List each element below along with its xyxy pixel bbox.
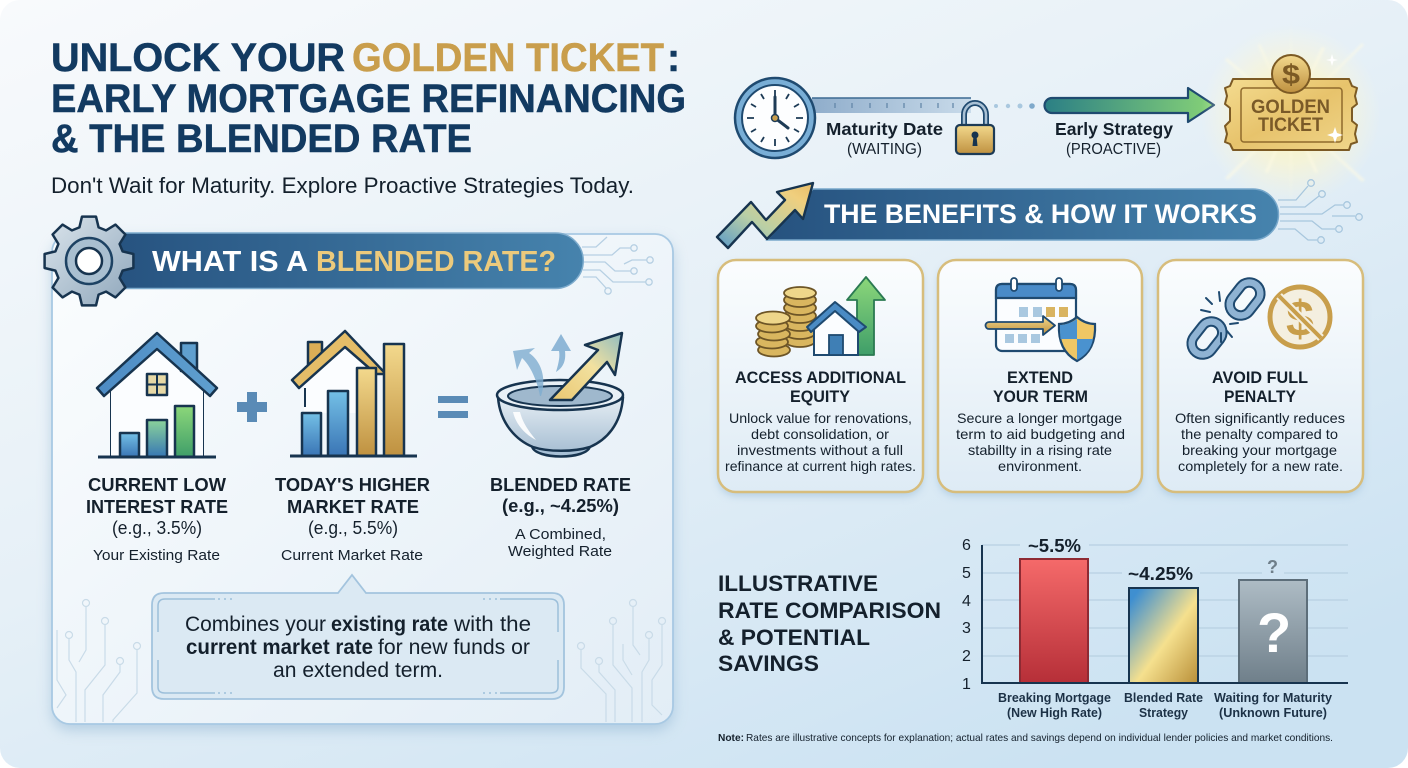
bar: blended rate	[1129, 588, 1198, 683]
label: current low rate: CURRENT LOW	[88, 475, 226, 495]
text: avoid full penalty: PENALTY	[1224, 388, 1296, 406]
text: avoid full penalty: completely for a new rate.	[1178, 458, 1343, 474]
callout: current market rate	[186, 636, 373, 659]
arrow: early strategy	[1045, 88, 1214, 122]
label: higher market rate: Current Market Rate	[281, 547, 423, 564]
label: blended rate: BLENDED RATE	[490, 475, 631, 495]
category labels: Waiting for Maturity	[1214, 690, 1333, 705]
circuit decoration banner	[582, 237, 653, 294]
panel: extend your term	[938, 260, 1142, 496]
label: early strategy: Early Strategy	[1055, 119, 1173, 139]
category labels: (New High Rate)	[1007, 705, 1102, 720]
category labels: Breaking Mortgage	[998, 690, 1111, 705]
icon: golden ticket: GOLDEN	[1251, 96, 1330, 118]
label: blended rate: A Combined,	[515, 526, 606, 543]
label: higher market rate	[275, 475, 430, 564]
heading: rate comparison: SAVINGS	[718, 651, 819, 676]
icon: rising arrow	[717, 183, 813, 248]
value labels: ~4.25%	[1128, 563, 1193, 584]
label: higher market rate: TODAY'S HIGHER	[275, 475, 430, 495]
panel: access additional equity	[718, 260, 923, 496]
text: access additional equity: debt consolidation, or	[751, 426, 889, 442]
label: early strategy	[1055, 119, 1173, 158]
icon: no dollar sign	[1270, 287, 1330, 347]
icon: equals	[438, 396, 468, 418]
y axis labels: 5	[962, 565, 971, 582]
heading banner: BLENDED RATE?	[316, 246, 556, 278]
icon: padlock	[956, 103, 994, 154]
heading: rate comparison: ILLUSTRATIVE	[718, 571, 878, 596]
text: access additional equity	[725, 369, 916, 474]
title: & THE BLENDED RATE	[51, 117, 472, 161]
heading banner: WHAT IS A	[152, 246, 308, 278]
callout: for new funds or	[378, 636, 530, 659]
callout	[152, 575, 564, 699]
text: avoid full penalty	[1175, 369, 1345, 474]
text: extend your term: environment.	[998, 458, 1082, 474]
icon: calendar shield	[986, 278, 1095, 361]
text: access additional equity: EQUITY	[790, 388, 850, 406]
heading: benefits banner	[717, 180, 1362, 248]
label: higher market rate: MARKET RATE	[287, 497, 419, 517]
title: GOLDEN TICKET	[352, 36, 664, 80]
panel: avoid full penalty	[1158, 260, 1363, 496]
icon: house with rising bars	[290, 331, 417, 456]
text: avoid full penalty: breaking your mortgage	[1182, 442, 1337, 458]
icon: golden ticket: $	[1282, 59, 1300, 90]
y axis labels: 1	[962, 676, 971, 693]
text: access additional equity: ACCESS ADDITIONAL	[735, 369, 906, 387]
label: current low rate: Your Existing Rate	[93, 547, 220, 564]
callout: existing rate	[331, 613, 448, 636]
circuit decoration left	[57, 600, 140, 722]
label: current low rate: (e.g., 3.5%)	[112, 518, 202, 538]
text: extend your term: term to aid budgeting and	[956, 426, 1125, 442]
icon: no dollar sign: $	[1286, 291, 1314, 347]
heading: rate comparison: & POTENTIAL	[718, 625, 870, 650]
title: EARLY MORTGAGE REFINANCING	[51, 77, 686, 121]
y axis labels: 6	[962, 537, 971, 554]
label: maturity date	[826, 119, 943, 158]
icon: gear	[45, 217, 133, 305]
text: avoid full penalty: AVOID FULL	[1212, 369, 1308, 387]
y axis labels: 4	[962, 593, 971, 610]
value labels: ?	[1257, 601, 1291, 664]
icon: golden ticket: TICKET	[1258, 114, 1323, 136]
category labels	[998, 690, 1333, 720]
heading banner	[110, 233, 583, 288]
text: extend your term: YOUR TERM	[993, 388, 1088, 406]
icon: coins house arrow	[756, 277, 885, 356]
timeline bar	[812, 98, 971, 113]
y axis labels: 3	[962, 620, 971, 637]
label: current low rate	[86, 475, 228, 564]
icon: mixing bowl	[497, 333, 623, 456]
icon: house with low bars	[97, 333, 217, 457]
callout: an extended term.	[273, 659, 443, 682]
callout: Combines your	[185, 613, 326, 636]
text: access additional equity: refinance at current high rates.	[725, 458, 916, 474]
text: extend your term	[956, 369, 1125, 474]
category labels: (Unknown Future)	[1219, 705, 1327, 720]
bar chart	[962, 535, 1348, 720]
text: access additional equity: Unlock value for renovations,	[729, 410, 912, 426]
timeline: maturity to golden ticket	[735, 18, 1381, 212]
footnote: Note:	[718, 732, 744, 744]
bar: waiting for maturity	[1239, 580, 1307, 683]
label: blended rate	[490, 475, 631, 560]
value labels	[1028, 535, 1291, 664]
title: :	[667, 36, 680, 80]
label: blended rate: Weighted Rate	[508, 543, 612, 560]
label: maturity date: (WAITING)	[847, 141, 922, 158]
value labels: ?	[1267, 557, 1278, 577]
label: early strategy: (PROACTIVE)	[1066, 141, 1161, 158]
text: extend your term: EXTEND	[1007, 369, 1073, 387]
label: current low rate: INTEREST RATE	[86, 497, 228, 517]
label: maturity date: Maturity Date	[826, 119, 943, 139]
label: higher market rate: (e.g., 5.5%)	[308, 518, 398, 538]
circuit decoration right	[578, 600, 666, 722]
text: avoid full penalty: the penalty compared to	[1181, 426, 1338, 442]
text: extend your term: Secure a longer mortgage	[957, 410, 1122, 426]
text: extend your term: stabillty in a rising rate	[968, 442, 1112, 458]
dots	[994, 103, 1035, 109]
y axis labels: 2	[962, 648, 971, 665]
heading: benefits banner: THE BENEFITS & HOW IT WORKS	[824, 199, 1257, 229]
text: avoid full penalty: Often significantly reduces	[1175, 410, 1345, 426]
label: blended rate: (e.g., ~4.25%)	[502, 496, 619, 516]
icon: golden ticket	[1201, 18, 1381, 212]
title: UNLOCK YOUR	[51, 36, 345, 80]
icon: clock	[735, 78, 815, 158]
heading: rate comparison	[718, 571, 941, 676]
footnote: Rates are illustrative concepts for explanation; actual rates and savings depend on individual lender policies and market conditions.	[746, 732, 1333, 744]
text: access additional equity: investments without a full	[737, 442, 903, 458]
icon: plus	[237, 392, 267, 422]
category labels: Strategy	[1139, 705, 1189, 720]
subtitle: Don't Wait for Maturity. Explore Proactive Strategies Today.	[51, 173, 634, 198]
y axis labels	[962, 537, 971, 693]
callout: with the	[453, 613, 531, 636]
icon: broken chain	[1187, 278, 1265, 359]
bar: breaking mortgage	[1020, 559, 1088, 683]
category labels: Blended Rate	[1124, 690, 1203, 705]
title	[51, 36, 686, 161]
heading: rate comparison: RATE COMPARISON	[718, 598, 941, 623]
value labels: ~5.5%	[1028, 535, 1081, 556]
